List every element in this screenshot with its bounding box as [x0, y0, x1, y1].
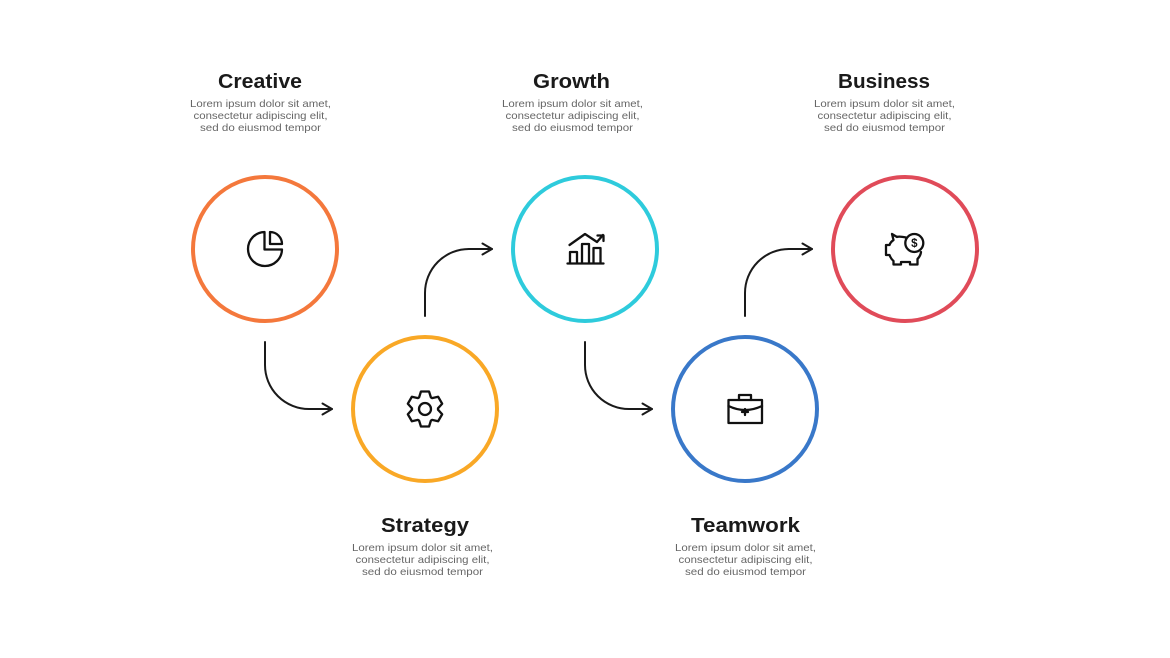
icon: gear [408, 392, 442, 426]
description: Teamwork: Lorem ipsum dolor sit amet, [675, 542, 816, 554]
description: Teamwork [675, 542, 816, 578]
arrow: Teamwork to Business [745, 244, 812, 316]
circle: Creative [193, 177, 337, 321]
heading: Strategy: Strategy [381, 514, 470, 537]
circle: Strategy [353, 337, 497, 481]
arrow: Growth to Teamwork [585, 342, 652, 414]
description: Growth: consectetur adipiscing elit, [506, 110, 640, 122]
description: Teamwork: sed do eiusmod tempor [685, 566, 807, 578]
heading: Creative: Creative [218, 70, 302, 93]
text block: Creative [190, 70, 331, 134]
description: Creative [190, 98, 331, 134]
description: Teamwork: consectetur adipiscing elit, [678, 554, 812, 566]
text block: Strategy [352, 514, 493, 578]
circle: Growth [513, 177, 657, 321]
description: Business: sed do eiusmod tempor [824, 122, 946, 134]
description: Strategy: sed do eiusmod tempor [362, 566, 484, 578]
description: Creative: consectetur adipiscing elit, [194, 110, 328, 122]
description: Creative: Lorem ipsum dolor sit amet, [190, 98, 331, 110]
description: Business: consectetur adipiscing elit, [818, 110, 952, 122]
icon: growth bar chart [568, 234, 604, 264]
icon: piggy bank with coin [886, 234, 923, 264]
description: Strategy [352, 542, 493, 578]
icon: pie chart [248, 232, 282, 266]
text block: Business [814, 70, 955, 134]
heading: Teamwork: Teamwork [691, 514, 801, 537]
description: Business [814, 98, 955, 134]
icon: piggy bank with coin: $ [911, 238, 918, 250]
arrow: Creative to Strategy [265, 342, 332, 414]
heading: Growth: Growth [533, 70, 610, 93]
circle: Business [833, 177, 977, 321]
heading: Business: Business [838, 70, 930, 93]
circle: Teamwork [673, 337, 817, 481]
description: Growth: Lorem ipsum dolor sit amet, [502, 98, 643, 110]
description: Strategy: Lorem ipsum dolor sit amet, [352, 542, 493, 554]
description: Growth: sed do eiusmod tempor [512, 122, 634, 134]
description: Growth [502, 98, 643, 134]
icon: briefcase [728, 395, 762, 423]
description: Creative: sed do eiusmod tempor [200, 122, 322, 134]
description: Business: Lorem ipsum dolor sit amet, [814, 98, 955, 110]
text block: Teamwork [675, 514, 816, 578]
text block: Growth [502, 70, 643, 134]
description: Strategy: consectetur adipiscing elit, [356, 554, 490, 566]
arrow: Strategy to Growth [425, 244, 492, 316]
